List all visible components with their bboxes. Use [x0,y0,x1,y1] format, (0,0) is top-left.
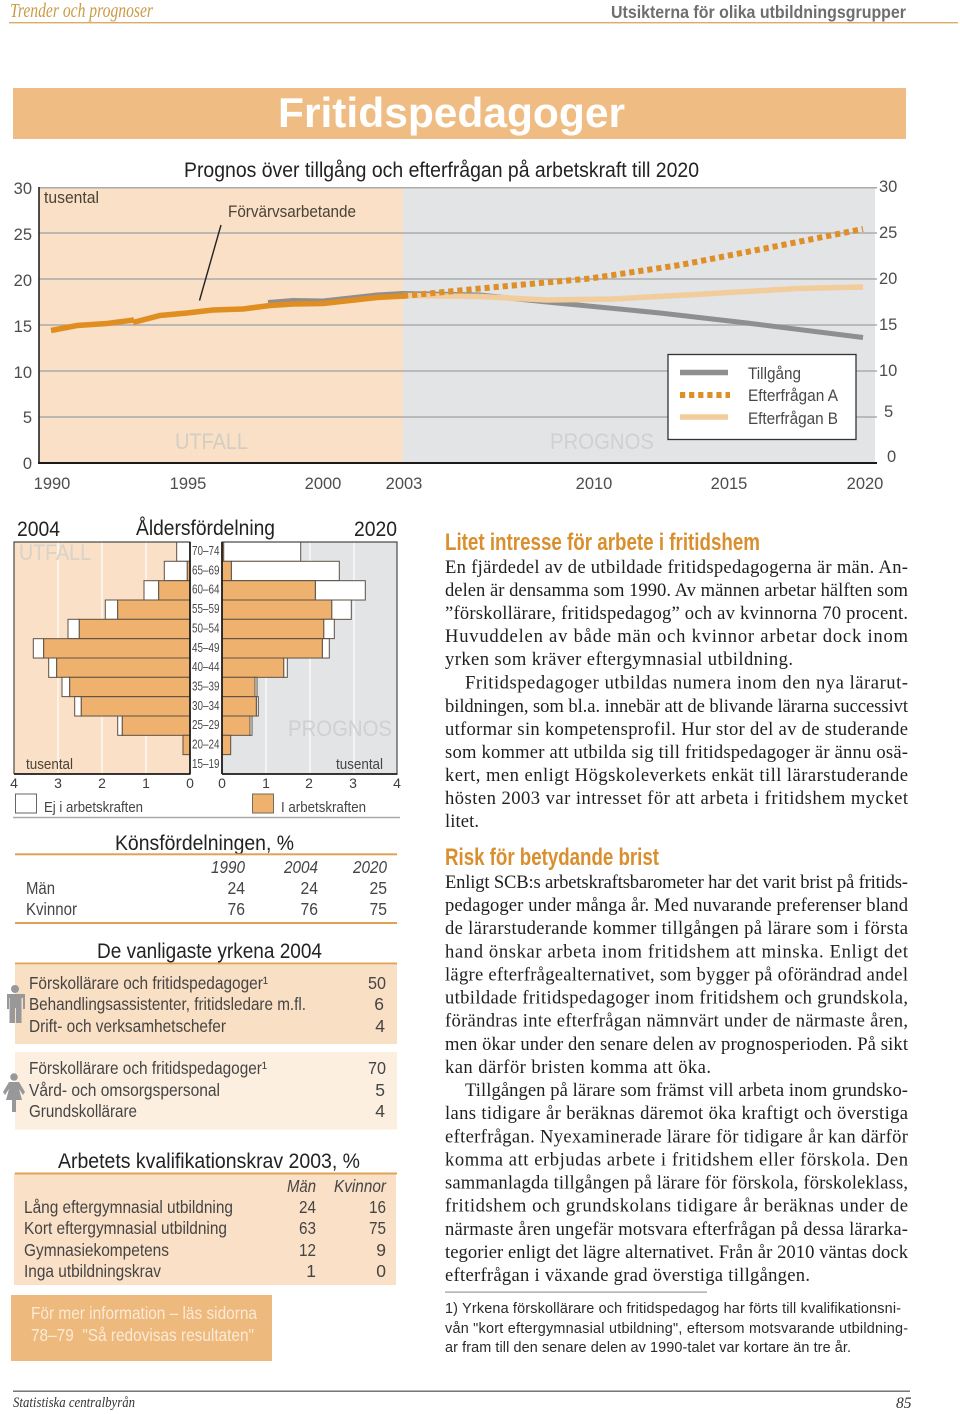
body text: komma att erbjudas arbete i fritidshem eller förskola. Den [445,1150,909,1170]
pyramid axis numbers: 3 [349,775,357,791]
line: demand A [403,229,863,296]
body text [445,872,909,1286]
body text: som kommer att utbilda sig till fritidspedagoger är ännu osä- [445,742,908,763]
body text: förändras inte efterfrågan nämnvärt under de närmaste åren, [445,1011,908,1032]
age group labels: 20–24 [192,738,220,752]
body text: kan därför bristen komma att öka. [445,1057,711,1078]
x axis labels: 1990 [34,475,70,493]
panel: men: 50 [368,973,386,993]
age group labels: 65–69 [192,563,220,577]
age group labels: 50–54 [192,621,220,635]
table: qualification requirements: 12 [299,1240,316,1260]
body text: sammanlagda tillgången på lärare för förskola, förskoleklass, [445,1173,908,1194]
icon: woman [3,1073,25,1112]
heading: Risk för betydande brist [445,844,659,871]
pyramid unit labels: tusental [336,757,383,773]
pyramid headings: Åldersfördelning [136,517,275,540]
legend: Tillgång [748,365,801,383]
unit label: tusental [44,189,99,207]
y axis labels left: 5 [23,409,32,427]
body text: hösten 2003 var intresset för att arbeta i fritidshem mycket [445,788,909,809]
pyramid axis numbers: 4 [10,775,18,791]
table: gender distribution: 76 [300,899,318,919]
age group labels [192,544,220,771]
chart heading: Prognos över tillgång och efterfrågan på arbetskraft till 2020 [184,158,699,182]
table: qualification requirements: 75 [369,1218,386,1238]
series label [200,203,356,300]
pyramid axis numbers: 1 [142,775,150,791]
legend [668,354,856,440]
body text: de lärarstuderande kommer tillgången på lärare som i första [445,918,908,939]
callout: more information [11,1295,272,1361]
body text: lans tidigare år beräknas däremot öka kraftigt och överstiga [445,1103,908,1124]
watermarks: UTFALL [175,429,248,454]
panel: women: Förskollärare och fritidspedagoger¹ [29,1058,267,1078]
body text: pedagoger under många år. Med nuvarande preferenser bland [445,895,909,916]
body text [445,557,909,832]
body text: Enligt SCB:s arbetskraftsbarometer har det varit brist på fritids- [445,872,908,893]
table: qualification requirements: Gymnasiekompetens [24,1240,169,1260]
panel: women: 5 [375,1080,385,1100]
page footer: Statistiska centralbyrån [13,1395,135,1411]
pyramid watermarks: UTFALL [19,540,91,565]
y axis labels right: 30 [879,178,897,196]
page header: Utsikterna för olika utbildningsgrupper [611,2,906,22]
body text: utbildade fritidspedagoger inom fritidshem och grundskola, [445,988,908,1009]
y axis labels left [14,180,32,473]
pyramid unit labels: tusental [26,757,73,773]
table: qualification requirements: 16 [369,1197,386,1217]
bars 2004 [33,542,190,755]
table: gender distribution: 1990 [211,857,245,877]
body text: delen är densamma som 1990. Av männen arbetar hälften som [445,580,909,601]
pyramid axis numbers: 2 [305,775,313,791]
table: qualification requirements: Inga utbildningskrav [24,1261,161,1281]
age group labels: 35–39 [192,680,220,694]
watermarks [175,429,654,454]
pyramid watermarks [19,540,392,741]
body text: men ökar under den senare delen av prognosperioden. På sikt [445,1034,909,1055]
x axis labels [34,475,883,493]
body text: utformar sin kompetensprofil. Hur stor del av de studerande [445,719,908,740]
article section: risk of shortage [445,844,909,1286]
table: gender distribution: 76 [228,899,245,919]
y axis labels right [879,178,897,466]
table: qualification requirements: 24 [299,1197,316,1217]
pyramid unit labels [26,757,383,773]
table: most common occupations: De vanligaste yrkena 2004 [97,940,322,963]
panel: men: Drift- och verksamhetschefer [29,1016,226,1036]
callout: more information: 78–79 "Så redovisas resultaten" [31,1325,254,1345]
body text: tegorier enligt det lägre alternativet. Från år 2010 väntas dock [445,1242,909,1263]
table: qualification requirements: 0 [376,1261,386,1281]
table: gender distribution: 2020 [352,857,387,877]
table: gender distribution: 75 [370,899,387,919]
table: gender distribution: 24 [228,878,245,898]
legend: Efterfrågan A [748,387,838,405]
footnote: vån "kort eftergymnasial utbildning", eftersom motsvarande utbildning- [445,1321,908,1337]
table: most common occupations [3,940,397,1130]
x axis labels: 2000 [305,475,341,493]
table: gender distribution: Kvinnor [26,899,77,919]
pyramid headings: 2020 [354,518,397,541]
body text: Fritidspedagoger utbildas numera inom den nya lärarut- [465,672,908,694]
pyramid legend: Ej i arbetskraften [44,800,143,816]
bars 2020 [222,542,365,755]
page header: Trender och prognoser [10,1,153,22]
pyramid axis numbers: 1 [262,775,270,791]
age group labels: 15–19 [192,757,220,771]
line: demand B [403,287,863,300]
callout: more information: För mer information – läs sidorna [31,1303,257,1323]
pyramid headings [17,517,397,541]
age pyramid [10,517,401,818]
page header [9,1,958,23]
heading: Litet intresse för arbete i fritidshem [445,529,760,556]
x axis labels: 2020 [847,475,883,493]
table: gender distribution [15,832,397,924]
line: supply [268,294,863,338]
table: qualification requirements: Lång eftergymnasial utbildning [24,1197,233,1217]
age group labels: 40–44 [192,660,220,674]
x axis labels: 2015 [711,475,747,493]
body text: kert, men enligt Högskoleverkets enkät till lärarstuderande [445,765,908,786]
panel: men: 6 [374,994,384,1014]
footnote [445,1292,908,1356]
y axis labels left: 25 [14,226,32,244]
panel: women [15,1052,397,1130]
body text: lägre efterfrågealternativet, som bygger på oförändrad andel [445,964,908,986]
pyramid axis numbers: 2 [98,775,106,791]
article section: low interest [445,529,909,832]
table: gender distribution: Män [26,878,55,898]
panel: men [15,962,397,1044]
body text: fritidshem och grundskolans tidigare år beräknas under de [445,1196,908,1217]
table: qualification requirements: Kvinnor [334,1176,387,1196]
table: gender distribution: 2004 [283,857,318,877]
age group labels: 55–59 [192,602,220,616]
body text: efterfrågan. Nyexaminerade lärare för tidigare år kan därför [445,1126,909,1147]
pyramid headings: 2004 [17,518,60,541]
panel: men: Behandlingsassistenter, fritidsledare m.fl. [29,994,306,1014]
y axis labels left: 10 [14,364,32,382]
table: qualification requirements: Arbetets kvalifikationskrav 2003, % [58,1150,360,1173]
panel: women: Grundskollärare [29,1101,137,1121]
table: qualification requirements: 9 [376,1240,386,1260]
panel: men: 4 [375,1016,385,1036]
table: qualification requirements [14,1150,397,1285]
body text: efterfrågan i växande grad överstiga tillgången. [445,1265,810,1286]
pyramid legend [16,794,366,816]
series label: Förvärvsarbetande [228,203,356,221]
icon: man [7,985,25,1023]
panel: men: Förskollärare och fritidspedagoger¹ [29,973,268,993]
body text: En fjärdedel av de utbildade fritidspedagogerna är män. An- [445,557,908,578]
age group labels: 30–34 [192,699,220,713]
panel: women: Vård- och omsorgspersonal [29,1080,220,1100]
x axis labels: 1995 [170,475,206,493]
panel: women: 4 [375,1101,385,1121]
pyramid axis numbers: 4 [393,775,401,791]
table: qualification requirements: Kort eftergymnasial utbildning [24,1218,227,1238]
y axis labels right: 15 [879,316,897,334]
body text: yrken som kräver eftergymnasial utbildning. [445,649,793,670]
y axis labels left: 0 [23,455,32,473]
panel: women: 70 [368,1058,386,1078]
page footer: 85 [896,1395,912,1412]
watermarks: PROGNOS [550,429,654,454]
table: qualification requirements: 1 [306,1261,316,1281]
body text: litet. [445,811,479,832]
table: gender distribution: 25 [370,878,387,898]
body text: närmaste åren ungefär motsvara efterfrågan på dessa lärarka- [445,1219,908,1240]
age group labels: 25–29 [192,718,220,732]
y axis labels right: 25 [879,224,897,242]
x axis labels: 2010 [576,475,612,493]
y axis labels left: 15 [14,318,32,336]
y axis labels right: 10 [879,362,897,380]
title banner [13,88,906,139]
table: qualification requirements: Män [287,1176,316,1196]
y axis labels right: 20 [879,270,897,288]
pyramid axis numbers: 3 [54,775,62,791]
y axis labels left: 20 [14,272,32,290]
pyramid axis numbers: 0 [186,775,194,791]
line: employed [51,296,405,330]
table: qualification requirements: 63 [299,1218,316,1238]
page footer [13,1390,912,1412]
body text: bildningen, som bl.a. innebär att de blivande lärarna successivt [445,696,909,717]
pyramid watermarks: PROGNOS [288,716,392,741]
legend: Efterfrågan B [748,410,838,428]
body text: ”förskollärare, fritidspedagog” och av kvinnorna 70 procent. [445,603,908,624]
y axis labels right: 5 [884,403,893,421]
line chart: forecast of supply and demand [14,158,897,493]
table: gender distribution: Könsfördelningen, % [115,832,294,855]
age group labels: 70–74 [192,544,220,558]
footnote: ar fram till den senare delen av 1990-talet var kortare än tre år. [445,1340,851,1356]
body text: Huvuddelen av både män och kvinnor arbetar dock inom [445,626,909,647]
pyramid legend: I arbetskraften [281,800,366,816]
title banner: Fritidspedagoger [278,89,625,136]
pyramid axis numbers [10,775,401,791]
footnote: 1) Yrkena förskollärare och fritidspedagog har förts till kvalifikationsni- [445,1301,901,1317]
x axis labels: 2003 [386,475,422,493]
body text: hand önskar arbeta inom fritidshem att minska. Enligt det [445,941,909,962]
body text: Tillgången på lärare som främst vill arbeta inom grundsko- [465,1080,908,1101]
age group labels: 45–49 [192,641,220,655]
pyramid axis numbers: 0 [218,775,226,791]
age group labels: 60–64 [192,583,220,597]
y axis labels left: 30 [14,180,32,198]
y axis labels right: 0 [887,448,896,466]
table: gender distribution: 24 [300,878,318,898]
